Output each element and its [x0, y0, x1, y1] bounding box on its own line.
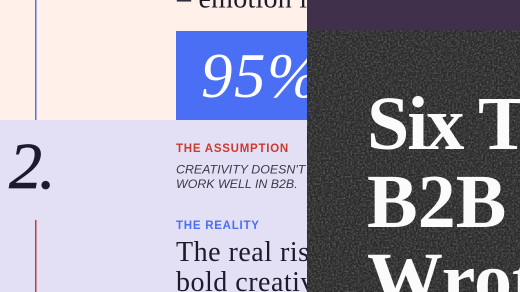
title: B2B: [367, 160, 506, 244]
panel: title, dark: [307, 0, 520, 292]
panel: myth one, cream: [0, 0, 321, 120]
panel: myth two, lavender: [0, 120, 328, 292]
purple top band: [307, 0, 520, 30]
assumption text: WORK WELL IN B2B.: [176, 177, 298, 191]
grainy dark background: [307, 30, 520, 292]
reality text: The real risk: [176, 237, 324, 268]
assumption text: CREATIVITY DOESN'T: [176, 162, 307, 176]
stat box: 95%: [176, 31, 321, 120]
stat box: 95%: 95%: [201, 41, 321, 111]
blue vertical rule: [35, 0, 36, 120]
myth number 2: 2.: [9, 130, 52, 203]
label: the reality: THE REALITY: [176, 220, 260, 232]
label: the assumption: THE ASSUMPTION: [176, 143, 289, 155]
red vertical rule: [35, 220, 36, 292]
